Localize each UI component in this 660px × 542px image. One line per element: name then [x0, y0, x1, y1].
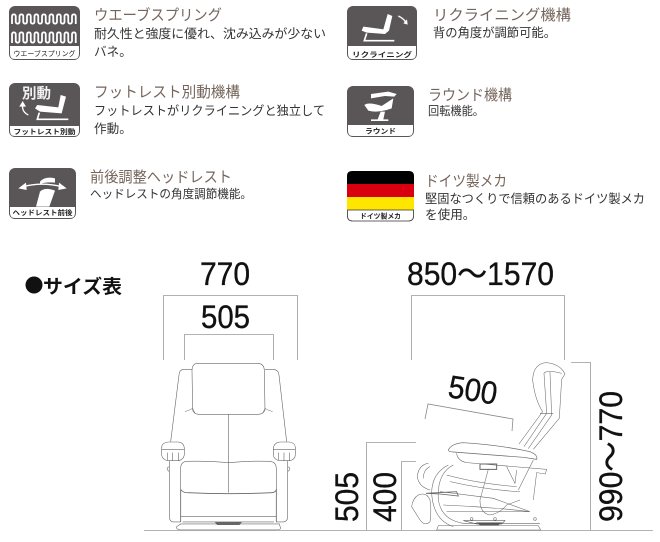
text: wave spring description: 耐久性と強度に優れ、沈み込みが少ない — [94, 26, 326, 41]
heading: size table: サイズ表 — [43, 275, 122, 298]
text: reclining description: 背の角度が調節可能。 — [433, 25, 556, 40]
icon: adjustable headrest: ヘッドレスト前後 — [12, 208, 72, 217]
dimension labels: side view: 850〜1570 — [407, 256, 554, 292]
heading: reclining: リクライニング機構 — [433, 7, 571, 24]
icon: independent footrest: フットレスト別動 — [14, 127, 76, 136]
text: independent footrest description: フットレストがリクライニングと独立して — [94, 104, 325, 118]
text: independent footrest description: 作動。 — [94, 122, 132, 136]
icon: German flag: ドイツ製メカ — [360, 212, 401, 220]
text: German mechanism description: 堅固なつくりで信頼のあるドイツ製メカ — [425, 191, 645, 206]
heading: German mechanism: ドイツ製メカ — [425, 173, 507, 190]
front view of chair — [162, 363, 295, 530]
text: adjustable headrest description: ヘッドレストの角度調節機能。 — [90, 187, 252, 201]
icon: adjustable headrest — [9, 168, 76, 219]
icon: swivel: ラウンド — [365, 126, 396, 136]
dimension labels: front view: 770 — [200, 256, 250, 292]
icon: reclining — [347, 6, 417, 60]
dimension labels: side view: 990〜770 — [593, 391, 629, 522]
dimension labels: side view: 400 — [367, 472, 403, 522]
icon: wave spring — [9, 6, 80, 60]
icon: swivel — [347, 86, 414, 137]
dimension labels: front view — [164, 256, 298, 360]
text: German mechanism description: を使用。 — [425, 207, 475, 222]
icon: reclining: リクライニング — [352, 50, 412, 59]
heading: independent footrest: フットレスト別動機構 — [94, 84, 240, 101]
heading: adjustable headrest: 前後調整ヘッドレスト — [90, 169, 232, 186]
icon: wave spring: ウエーブスプリング — [14, 49, 76, 58]
dimension labels: side view: 505 — [329, 472, 365, 522]
text: wave spring description: バネ。 — [94, 45, 132, 59]
heading: swivel: ラウンド機構 — [428, 87, 512, 104]
icon: German flag — [347, 171, 414, 221]
floor line — [144, 530, 653, 532]
icon: independent footrest: 別動 — [22, 86, 51, 102]
dimension labels: side view: 500 — [446, 368, 500, 412]
heading: wave spring: ウエーブスプリング — [94, 6, 222, 24]
icon: independent footrest — [9, 83, 80, 137]
side view of chair — [412, 363, 565, 530]
dimension labels: side view — [329, 256, 629, 530]
text: swivel description: 回転機能。 — [428, 104, 484, 118]
dimension labels: front view: 505 — [201, 299, 250, 335]
